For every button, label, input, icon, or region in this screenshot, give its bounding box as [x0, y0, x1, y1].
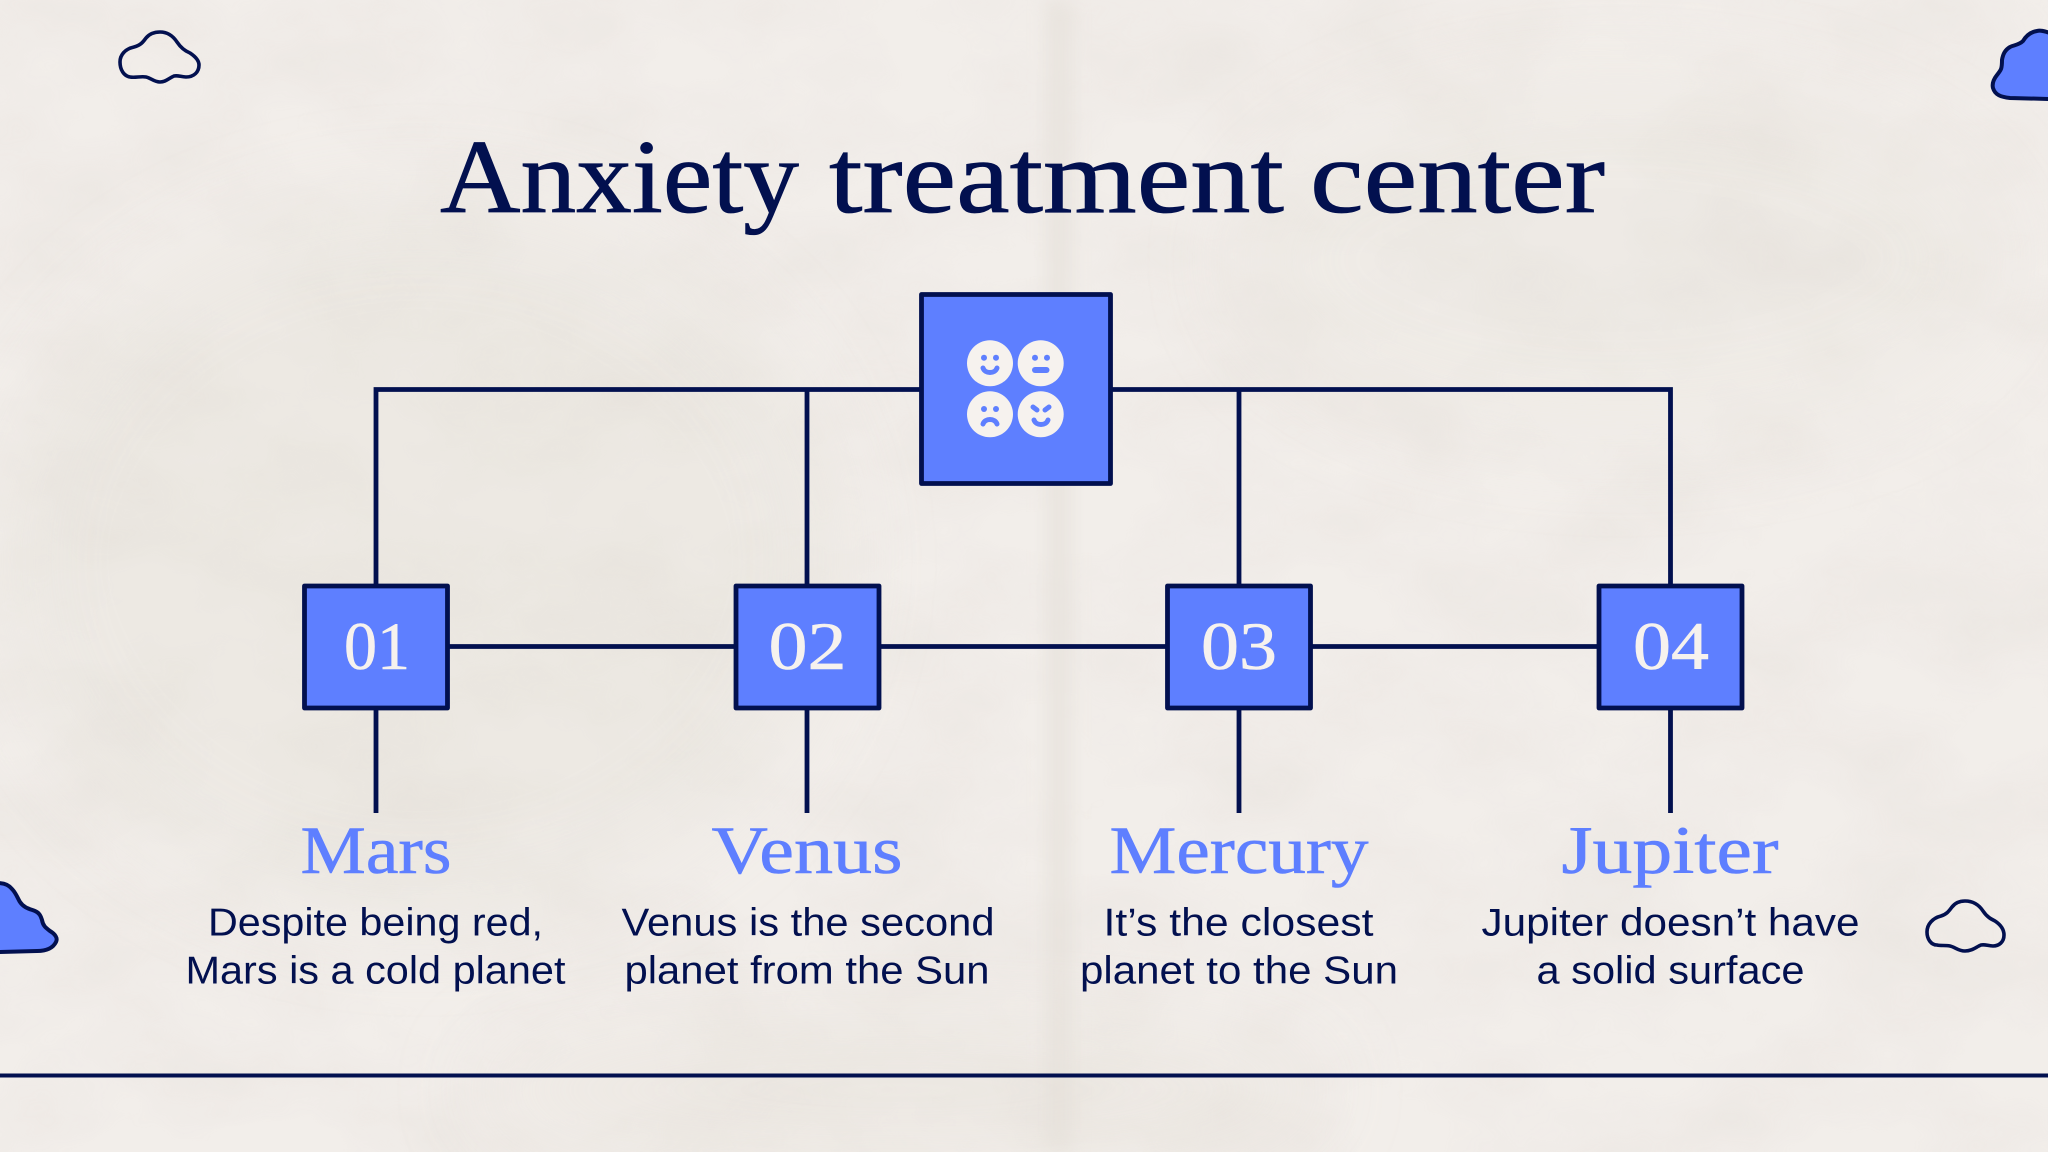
column: Mars: Despite being red, — [208, 902, 543, 944]
column: Venus: planet from the Sun — [624, 950, 990, 992]
box 04 — [1599, 586, 1742, 708]
column: Mercury: Mercury — [1110, 812, 1368, 888]
box 01: 01 — [344, 608, 410, 684]
title: Anxiety — [440, 118, 800, 235]
column: Mercury: It’s the closest — [1104, 902, 1374, 944]
column: Venus: Venus is the second — [622, 902, 994, 944]
icon: outline cloud lower right — [1927, 901, 2004, 951]
column: Mercury: planet to the Sun — [1080, 950, 1398, 992]
icon: filled cloud top right — [1993, 31, 2048, 99]
column: Mars: Mars is a cold planet — [186, 950, 566, 992]
title: center — [1310, 118, 1605, 235]
column: Venus — [622, 812, 994, 992]
column: Mercury — [1080, 812, 1398, 992]
title: treatment — [829, 118, 1284, 235]
column: Jupiter: Jupiter doesn’t have — [1482, 902, 1860, 944]
icon: outline cloud upper left — [120, 32, 199, 82]
box 02 — [736, 586, 879, 708]
icon: filled cloud lower left — [0, 883, 57, 952]
box 03: 03 — [1201, 608, 1277, 684]
box 02: 02 — [768, 608, 846, 684]
column: Jupiter — [1482, 812, 1860, 992]
column: Mars: Mars — [300, 812, 452, 888]
box 04: 04 — [1633, 608, 1709, 684]
column: Jupiter: Jupiter — [1562, 812, 1779, 888]
central icon box — [922, 294, 1110, 484]
box 03 — [1168, 586, 1310, 708]
bottom rule — [0, 1074, 2048, 1078]
column: Mars — [186, 812, 566, 992]
box 01 — [304, 586, 448, 708]
connector lines — [376, 390, 1670, 813]
icon: four mood faces — [967, 340, 1064, 437]
column: Jupiter: a solid surface — [1536, 950, 1804, 992]
column: Venus: Venus — [712, 812, 902, 888]
